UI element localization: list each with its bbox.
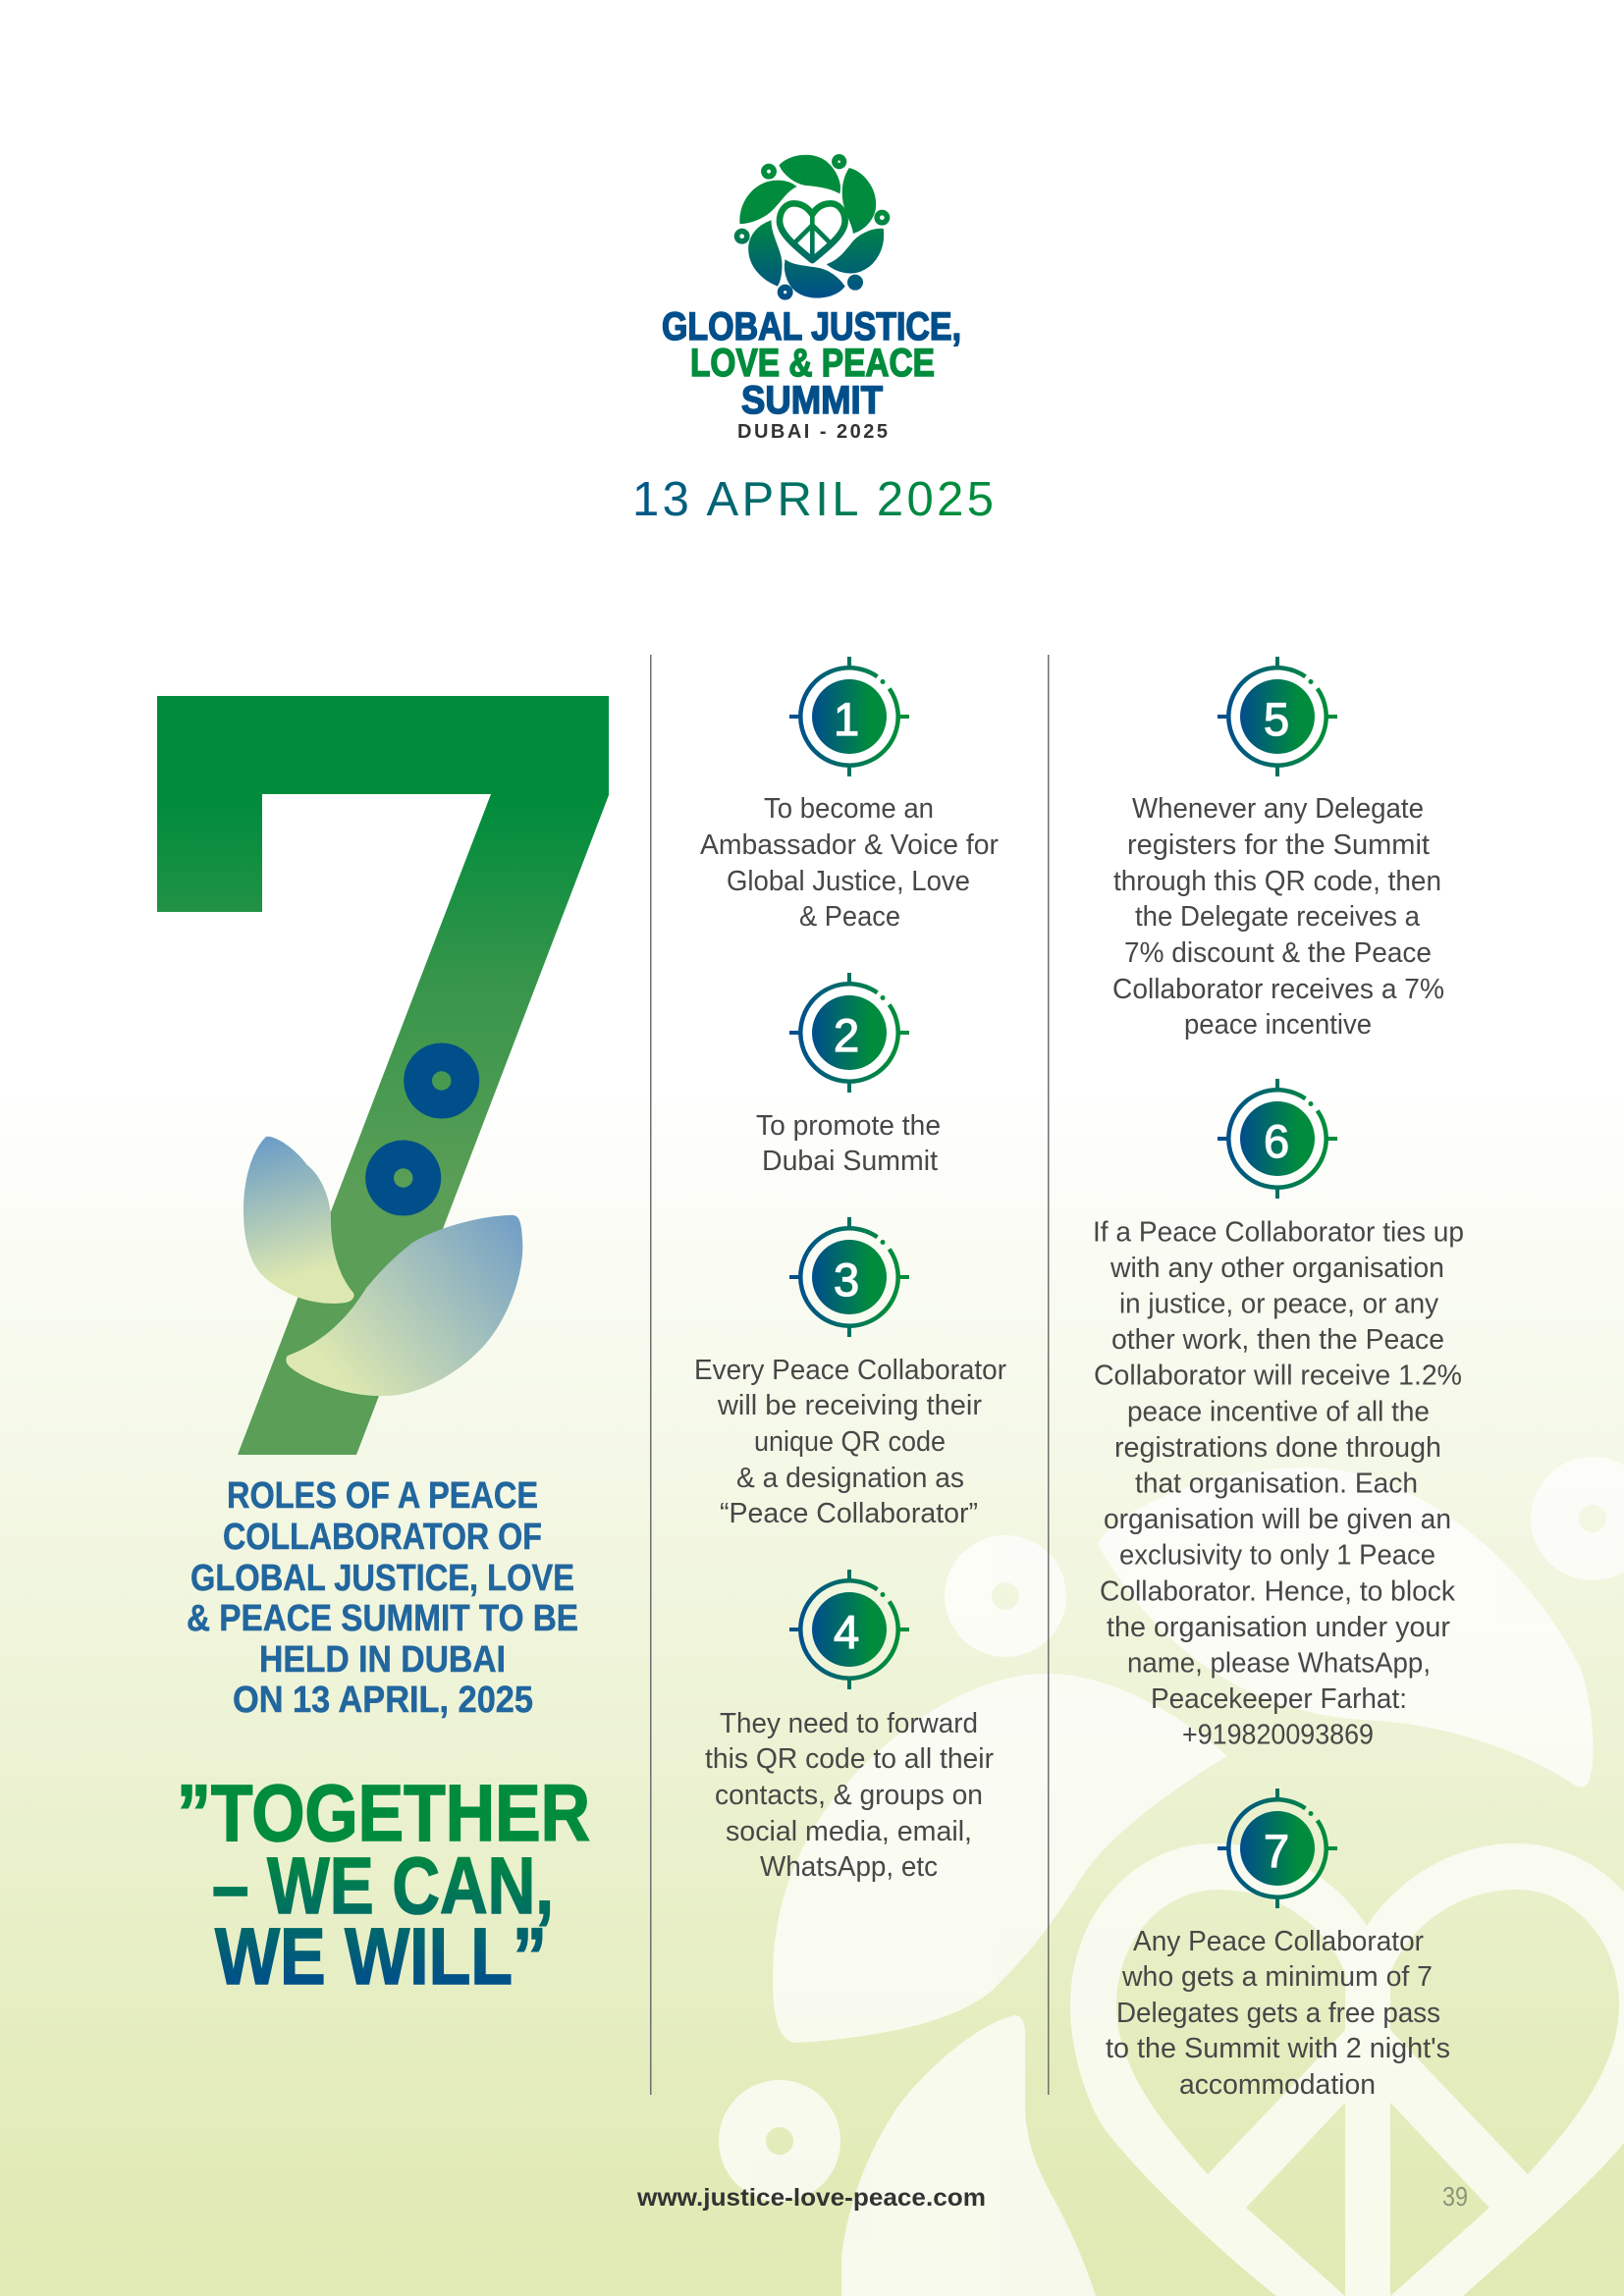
column divider right <box>1048 655 1049 2095</box>
role 5 text <box>1112 793 1444 1041</box>
role 3 icon: 3 <box>834 1254 859 1306</box>
role 6 text: If a Peace Collaborator ties up <box>1093 1216 1464 1248</box>
role 4 text: this QR code to all their <box>705 1743 994 1775</box>
role 5 text: Collaborator receives a 7% <box>1112 974 1444 1005</box>
role 6 text: +919820093869 <box>1182 1720 1374 1751</box>
role 1 text: & Peace <box>799 901 900 933</box>
role 6 text: registrations done through <box>1114 1432 1441 1464</box>
logo: summit name <box>662 305 961 443</box>
role 2 icon <box>789 973 909 1093</box>
role 6 text: organisation will be given an <box>1104 1504 1451 1535</box>
role 4 text: social media, email, <box>726 1816 972 1847</box>
role 7 text: Delegates gets a free pass <box>1116 1998 1440 2029</box>
logo: summit emblem <box>734 154 890 300</box>
role 6 text: in justice, or peace, or any <box>1119 1288 1438 1319</box>
role 7 text: who gets a minimum of 7 <box>1121 1961 1433 1993</box>
role 2 text: To promote the <box>756 1110 941 1142</box>
role 1 text <box>700 793 999 933</box>
ring dot upper <box>404 1042 479 1119</box>
right leaf <box>286 1215 522 1396</box>
role 3 text <box>694 1355 1006 1529</box>
column divider left <box>650 655 652 2095</box>
role 7 text: Any Peace Collaborator <box>1133 1926 1424 1957</box>
role 6 icon <box>1218 1079 1337 1199</box>
role 4 text: WhatsApp, etc <box>760 1851 938 1883</box>
heading: roles of a peace collaborator: & PEACE SUMMIT TO BE <box>187 1598 578 1639</box>
role 7 icon <box>1218 1789 1337 1908</box>
role 6 icon: 6 <box>1264 1115 1289 1167</box>
role 6 text: Peacekeeper Farhat: <box>1151 1683 1407 1715</box>
role 1 icon: 1 <box>834 693 859 745</box>
role 2 text: Dubai Summit <box>762 1146 938 1177</box>
role 6 text: exclusivity to only 1 Peace <box>1119 1540 1435 1572</box>
role 3 text: unique QR code <box>754 1426 946 1458</box>
page number: 39 <box>1442 2181 1468 2212</box>
slogan: – WE CAN, <box>212 1842 554 1931</box>
role 7 text: to the Summit with 2 night's <box>1106 2033 1450 2064</box>
role 4 text: contacts, & groups on <box>715 1780 983 1811</box>
role 1 text: Global Justice, Love <box>727 866 970 897</box>
logo: summit name: LOVE & PEACE <box>690 342 935 385</box>
role 5 icon <box>1218 657 1337 776</box>
role 7 text: accommodation <box>1179 2069 1376 2101</box>
role 6 text: Collaborator. Hence, to block <box>1100 1575 1455 1607</box>
website footer: www.justice-love-peace.com <box>636 2184 986 2212</box>
heading: roles of a peace collaborator: COLLABORATOR OF <box>223 1517 542 1558</box>
role 6 text: Collaborator will receive 1.2% <box>1094 1361 1462 1392</box>
role 5 text: the Delegate receives a <box>1135 901 1421 933</box>
role 6 text: name, please WhatsApp, <box>1127 1647 1431 1679</box>
role 5 text: Whenever any Delegate <box>1132 793 1424 825</box>
watermark: leaves, dots and peace heart <box>719 1457 1624 2296</box>
slogan: WE WILL” <box>215 1912 547 2002</box>
role 5 text: registers for the Summit <box>1127 829 1430 861</box>
heading: roles of a peace collaborator: ROLES OF A PEACE <box>227 1475 538 1517</box>
role 2 icon: 2 <box>834 1009 859 1061</box>
role 6 text: peace incentive of all the <box>1127 1396 1430 1427</box>
heading: roles of a peace collaborator: GLOBAL JUSTICE, LOVE <box>190 1558 574 1599</box>
role 4 text: They need to forward <box>720 1708 978 1739</box>
big number 7 with leaves <box>157 696 609 1455</box>
role 3 text: & a designation as <box>736 1463 964 1494</box>
role 1 text: Ambassador & Voice for <box>700 829 999 861</box>
logo: summit name: SUMMIT <box>741 379 883 422</box>
role 2 text <box>756 1110 941 1177</box>
heading: roles of a peace collaborator: HELD IN DUBAI <box>259 1639 506 1681</box>
slogan <box>177 1769 590 2002</box>
role 3 text: will be receiving their <box>717 1390 982 1421</box>
ring dot lower <box>365 1141 441 1215</box>
slogan: ”TOGETHER <box>177 1769 590 1858</box>
role 1 text: To become an <box>764 793 934 825</box>
heading: roles of a peace collaborator <box>187 1475 578 1721</box>
role 6 text <box>1093 1216 1464 1751</box>
role 1 icon <box>789 657 909 776</box>
role 4 icon: 4 <box>834 1606 859 1658</box>
role 5 icon: 5 <box>1264 693 1289 745</box>
role 7 icon: 7 <box>1264 1825 1289 1877</box>
left leaf <box>244 1137 354 1304</box>
role 4 icon <box>789 1570 909 1689</box>
heading: roles of a peace collaborator: ON 13 APRIL, 2025 <box>233 1680 533 1721</box>
date heading: 13 APRIL 2025 <box>632 473 994 526</box>
role 6 text: other work, then the Peace <box>1111 1324 1444 1356</box>
logo: summit name: GLOBAL JUSTICE, <box>662 305 961 348</box>
role 6 text: with any other organisation <box>1110 1253 1444 1284</box>
role 5 text: through this QR code, then <box>1113 866 1441 897</box>
role 7 text <box>1106 1926 1450 2101</box>
role 3 text: “Peace Collaborator” <box>720 1498 978 1529</box>
role 5 text: peace incentive <box>1184 1009 1372 1041</box>
role 3 text: Every Peace Collaborator <box>694 1355 1006 1386</box>
role 3 icon <box>789 1217 909 1337</box>
role 4 text <box>705 1708 994 1883</box>
logo: summit name: DUBAI - 2025 <box>737 421 888 443</box>
role 5 text: 7% discount & the Peace <box>1124 937 1432 969</box>
role 6 text: the organisation under your <box>1107 1612 1450 1643</box>
role 6 text: that organisation. Each <box>1135 1468 1418 1500</box>
